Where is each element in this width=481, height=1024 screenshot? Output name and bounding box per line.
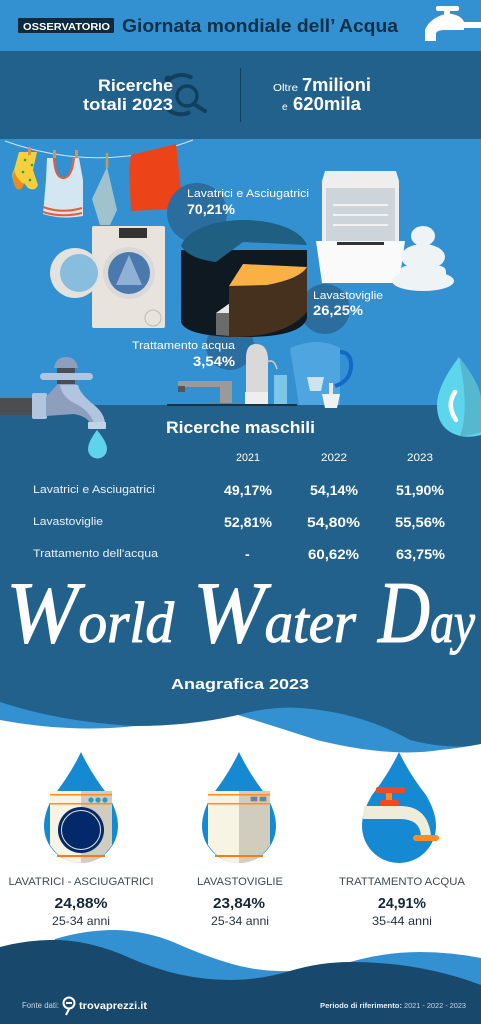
chart label: washers: 70,21% xyxy=(187,201,236,217)
panel: total searches band: 7milioni xyxy=(302,75,371,95)
illustration: dishwasher xyxy=(316,171,454,291)
row: washers xyxy=(33,482,445,498)
row: washers: 49,17% xyxy=(224,482,273,498)
panel: total searches band xyxy=(0,51,481,139)
panel: male searches background xyxy=(0,405,481,747)
stat: water treatment: 24,91% xyxy=(378,896,426,912)
row: dishwashers: 54,80% xyxy=(307,514,361,530)
heading: male searches: Ricerche maschili xyxy=(166,418,315,437)
table header years: 2021 xyxy=(236,452,260,464)
panel: total searches band: Oltre xyxy=(273,83,299,94)
footer wave dark xyxy=(0,940,481,1024)
footer period: 2021 - 2022 - 2023 xyxy=(404,1001,466,1010)
chart label: dishwashers: Lavastoviglie xyxy=(313,290,383,302)
footer source: Fonte dati: xyxy=(22,1001,59,1010)
footer source xyxy=(22,998,148,1015)
chart label: dishwashers xyxy=(313,290,383,318)
row: water treatment: 63,75% xyxy=(396,546,446,562)
stat: water treatment xyxy=(339,876,466,928)
stat: washers: LAVATRICI - ASCIUGATRICI xyxy=(8,876,154,888)
script title xyxy=(6,565,475,662)
chart label: washers xyxy=(187,188,309,217)
stat: dishwashers xyxy=(197,876,283,928)
panel: total searches band: totali 2023 xyxy=(83,95,173,114)
footer period xyxy=(320,1001,466,1010)
icon: hanging cloth xyxy=(92,153,117,225)
icon: dishwasher drop xyxy=(202,752,276,863)
row: dishwashers: 55,56% xyxy=(395,514,446,530)
pie slice: orange xyxy=(229,264,307,337)
illustration: clothesline xyxy=(5,140,193,225)
footer wave light xyxy=(55,930,481,990)
icon: plates xyxy=(392,226,454,291)
row: dishwashers: 52,81% xyxy=(224,514,273,530)
row: washers: Lavatrici e Asciugatrici xyxy=(33,484,155,496)
header badge xyxy=(18,18,114,33)
stat: dishwashers: 23,84% xyxy=(213,896,265,912)
footer source: trovaprezzi.it xyxy=(79,1000,148,1012)
chart label: washers: Lavatrici e Asciugatrici xyxy=(187,188,309,200)
header badge: OSSERVATORIO xyxy=(23,21,110,33)
script title: World xyxy=(6,565,175,662)
table header years: 2023 xyxy=(407,452,433,464)
icon: red towel xyxy=(129,144,182,211)
icon: tank top xyxy=(43,150,83,218)
icon: search globe xyxy=(164,75,205,114)
script title: Water xyxy=(193,565,356,662)
stat: washers: 25-34 anni xyxy=(52,914,110,928)
table header years xyxy=(236,452,433,464)
row: water treatment: Trattamento dell'acqua xyxy=(33,548,159,560)
title: Giornata mondiale dell’ Acqua xyxy=(122,16,399,36)
icon: washer drop xyxy=(44,752,118,863)
panel: total searches band: Ricerche xyxy=(98,76,173,95)
stat: water treatment: 35-44 anni xyxy=(372,914,432,928)
stat: dishwashers: 25-34 anni xyxy=(211,914,269,928)
chart label: water treatment: 3,54% xyxy=(193,353,236,369)
row: washers: 54,14% xyxy=(310,482,359,498)
chart: 3D pie xyxy=(181,220,307,337)
row: dishwashers: Lavastoviglie xyxy=(33,516,103,528)
icon: tap drop xyxy=(362,752,439,863)
callout circles xyxy=(167,183,350,370)
heading: demographics: Anagrafica 2023 xyxy=(171,676,309,693)
chart label: water treatment: Trattamento acqua xyxy=(132,340,236,352)
row: water treatment: - xyxy=(245,546,250,562)
icon: big water drop xyxy=(437,357,481,437)
chart label: water treatment xyxy=(132,340,236,369)
icon: header tap xyxy=(425,6,481,41)
icon: trovaprezzi logo xyxy=(64,998,74,1015)
row: washers: 51,90% xyxy=(396,482,445,498)
stat: washers xyxy=(8,876,154,928)
row: water treatment xyxy=(33,546,446,562)
illustration: washing machine xyxy=(50,226,165,328)
chart label: dishwashers: 26,25% xyxy=(313,302,364,318)
row: water treatment: 60,62% xyxy=(308,546,360,562)
illustration: dripping tap xyxy=(0,357,107,458)
table header years: 2022 xyxy=(321,452,347,464)
white demographics section xyxy=(0,715,481,1000)
panel: total searches band: e xyxy=(282,102,288,113)
table: male searches xyxy=(33,452,446,562)
icon: sock xyxy=(12,147,38,189)
panel: total searches band: 620mila xyxy=(293,94,362,114)
stat: washers: 24,88% xyxy=(54,896,108,912)
illustration: water filter and jug xyxy=(167,342,351,408)
stat: dishwashers: LAVASTOVIGLIE xyxy=(197,876,283,888)
stat: water treatment: TRATTAMENTO ACQUA xyxy=(339,876,466,888)
row: dishwashers xyxy=(33,514,446,530)
footer period: Periodo di riferimento: xyxy=(320,1001,402,1010)
pie slice: grey xyxy=(216,303,230,336)
